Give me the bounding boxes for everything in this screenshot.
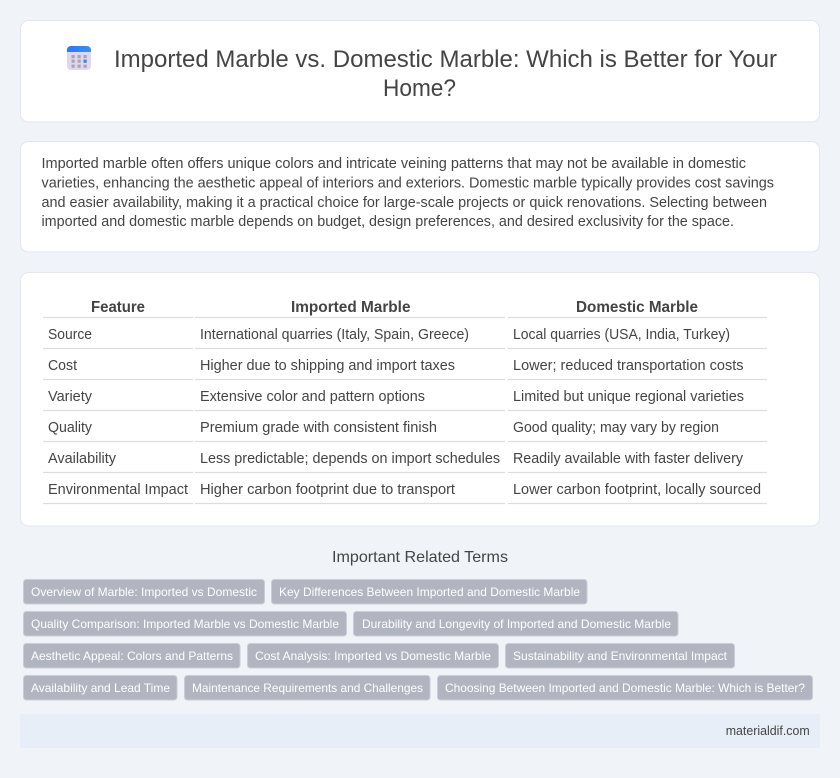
tag: quality comparison xyxy=(24,612,346,636)
row: availability: Availability xyxy=(48,451,117,467)
text block: intro: and easier availability, making it a practical choice for large-scale projects or quick renovations. Selecting between xyxy=(42,195,767,211)
title xyxy=(114,46,777,102)
row: source: International quarries (Italy, Spain, Greece) xyxy=(200,327,469,343)
tag: maintenance xyxy=(184,676,430,700)
table header: Domestic Marble xyxy=(576,299,698,316)
tag: overview: Overview of Marble: Imported vs Domestic xyxy=(31,585,257,599)
row: source: Source xyxy=(48,327,92,343)
row: variety: Variety xyxy=(48,389,93,405)
tag: cost analysis: Cost Analysis: Imported vs Domestic Marble xyxy=(255,649,491,663)
title: Imported Marble vs. Domestic Marble: Which is Better for Your xyxy=(114,46,777,73)
row: source: Local quarries (USA, India, Turkey) xyxy=(513,327,730,343)
row: environmental impact: Higher carbon footprint due to transport xyxy=(200,482,455,498)
row: quality: Good quality; may vary by region xyxy=(513,420,719,436)
row: environmental impact: Lower carbon footprint, locally sourced xyxy=(513,482,761,498)
row: variety: Limited but unique regional varieties xyxy=(513,389,744,405)
tag: availability xyxy=(24,676,177,700)
row: variety xyxy=(48,389,744,405)
tag: aesthetic appeal xyxy=(24,644,240,668)
footer xyxy=(20,714,820,748)
row: cost xyxy=(48,358,744,374)
text block: intro xyxy=(42,156,774,230)
row: quality: Premium grade with consistent finish xyxy=(200,420,437,436)
panel: intro paragraph xyxy=(20,142,820,252)
row: quality: Quality xyxy=(48,420,93,436)
text block: intro: Imported marble often offers unique colors and intricate veining patterns that may not be available in domestic xyxy=(42,156,746,172)
tag: maintenance: Maintenance Requirements and Challenges xyxy=(192,681,423,695)
tag: choosing: Choosing Between Imported and Domestic Marble: Which is Better? xyxy=(445,681,805,695)
row: environmental impact xyxy=(48,482,761,498)
tag: aesthetic appeal: Aesthetic Appeal: Colors and Patterns xyxy=(31,649,233,663)
title: Home? xyxy=(383,75,456,102)
row: availability: Less predictable; depends on import schedules xyxy=(200,451,500,467)
tag: durability: Durability and Longevity of Imported and Domestic Marble xyxy=(362,617,671,631)
tag: overview xyxy=(24,580,264,604)
tag: sustainability: Sustainability and Environmental Impact xyxy=(513,649,728,663)
table header: Feature xyxy=(91,299,145,316)
tag: cost analysis xyxy=(248,644,498,668)
row: cost: Cost xyxy=(48,358,77,374)
tag: sustainability xyxy=(506,644,734,668)
text block: intro: varieties, enhancing the aesthetic appeal of interiors and exteriors. Domestic marble typically provides cost savings xyxy=(42,176,774,192)
tag: durability xyxy=(354,612,678,636)
row: variety: Extensive color and pattern options xyxy=(200,389,425,405)
footer: materialdif.com xyxy=(726,724,810,738)
row: quality xyxy=(48,420,719,436)
icon: calendar xyxy=(67,46,91,70)
panel: related term tags xyxy=(24,580,812,700)
tag: availability: Availability and Lead Time xyxy=(31,681,170,695)
row: source xyxy=(48,327,730,343)
row: availability xyxy=(48,451,744,467)
table header xyxy=(91,299,698,316)
tag: key differences: Key Differences Between Imported and Domestic Marble xyxy=(279,585,580,599)
row: cost: Lower; reduced transportation costs xyxy=(513,358,744,374)
tag: key differences xyxy=(272,580,587,604)
row: environmental impact: Environmental Impact xyxy=(48,482,188,498)
tag: quality comparison: Quality Comparison: Imported Marble vs Domestic Marble xyxy=(31,617,339,631)
row: cost: Higher due to shipping and import taxes xyxy=(200,358,455,374)
table header: Imported Marble xyxy=(291,299,411,316)
panel: comparison table xyxy=(20,272,820,526)
tag: choosing xyxy=(438,676,812,700)
heading: related terms: Important Related Terms xyxy=(332,549,508,566)
text block: intro: imported and domestic marble depends on budget, design preferences, and desired exclusivity for the space. xyxy=(42,214,734,230)
row: availability: Readily available with faster delivery xyxy=(513,451,744,467)
panel: header xyxy=(20,20,820,122)
